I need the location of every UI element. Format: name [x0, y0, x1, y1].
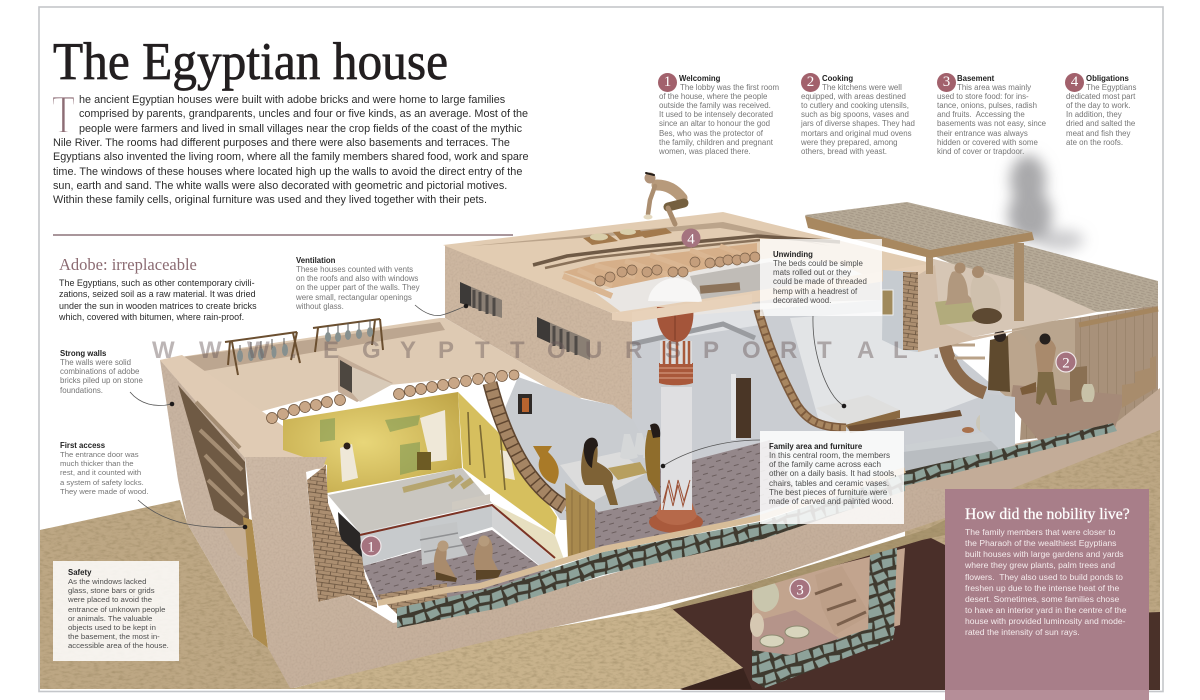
back mural wall [283, 392, 462, 493]
box: Unwinding [760, 239, 882, 316]
box: Family area and furniture [760, 431, 904, 524]
box: Family area and furniture: of the family came across each [769, 460, 881, 469]
marker 3 [790, 579, 810, 599]
numbered note 1: Welcoming: Welcoming [679, 74, 720, 83]
marker 3: 3 [796, 582, 804, 598]
raised platform [328, 468, 492, 533]
numbered note 4: Obligations: of the day to work. [1066, 101, 1130, 110]
note: First access: a system of safety locks. [60, 478, 144, 487]
numbered note 2: Cooking: The kitchens were well [822, 83, 902, 92]
numbered note 2: Cooking: such as big spoons, vases and [801, 110, 909, 119]
badge 1 [658, 73, 677, 92]
front low wall with stones [378, 423, 1117, 628]
upper floor interior rooms [625, 270, 1015, 530]
text: Adobe irreplaceable [59, 255, 257, 322]
marker 2: 2 [1062, 356, 1070, 372]
numbered note 1: Welcoming [658, 73, 779, 156]
intro text block: Within these family cells, original furniture was used and they lived together with their pets. [53, 194, 487, 206]
basement jars and plates [750, 578, 809, 647]
numbered note 1: Welcoming: It used to be intensely decorated [659, 110, 773, 119]
numbered note 4: Obligations: In addition, they [1066, 110, 1122, 119]
box: Safety: accessible area of the house. [68, 641, 169, 650]
numbered note 3: Basement: and fruits. Accessing the [937, 110, 1025, 119]
bench [905, 430, 998, 470]
intro text block: sun, earth and sand. The white walls were also decorated with geometric and pictorial motives. [53, 180, 507, 192]
kitchen: plank back wall and reed roof [925, 243, 1158, 440]
badge 2 [801, 73, 820, 92]
text: Adobe irreplaceable: which, covered with bitumen, where rain-proof. [59, 312, 244, 322]
numbered note 2: Cooking: were they prepared, among [801, 138, 898, 147]
box: Family area and furniture: The best pieces of furniture were [769, 488, 887, 497]
note: Strong walls: Strong walls [60, 349, 106, 358]
numbered note 3: Basement: used to store food: for ins- [937, 92, 1029, 101]
panel: How did the nobility live [945, 489, 1149, 700]
box: Safety: the basement, the most in- [68, 632, 160, 641]
note: First access: rest, and it counted with [60, 468, 141, 477]
numbered note 2: Cooking: others, bread with yeast. [801, 147, 887, 156]
text: Adobe irreplaceable: The Egyptians, such as other contemporary civili- [59, 278, 255, 288]
small stairs [420, 522, 468, 565]
note: Strong walls: bricks piled up on stone [60, 376, 143, 385]
pergola reed roof [805, 202, 1033, 252]
text: Adobe irreplaceable: zations, seized soil as a raw material. It was dried [59, 289, 256, 299]
note: First access: The entrance door was [60, 450, 139, 459]
box: Safety [53, 561, 179, 661]
curved brick cut wall left [755, 297, 846, 428]
box: Unwinding: decorated wood. [773, 296, 831, 305]
note: Ventilation: on the roofs and also with windows [296, 274, 418, 283]
numbered note 4: Obligations: The Egyptians [1086, 83, 1136, 92]
panel text: freshen up due to the intense heat of the [965, 583, 1119, 593]
sand above basement [654, 520, 945, 610]
box: Safety: glass, stone bars or grids [68, 586, 155, 595]
panel text: desert. Sometimes, some families chose [965, 594, 1119, 604]
numbered note 1: Welcoming: of the house, where the people [659, 92, 767, 101]
room 1 with painted walls [245, 370, 945, 688]
numbered note 3: Basement [937, 73, 1046, 156]
panel text: the Pharaoh of the wealthiest Egyptians [965, 538, 1116, 548]
numbered note 2: Cooking [800, 73, 915, 156]
note: Strong walls [60, 349, 143, 395]
box: Unwinding: mats rolled out or they [773, 268, 851, 277]
box: Safety: were placed to avoid the [68, 595, 152, 604]
intro text block: he ancient Egyptian houses were built with adobe bricks and were home to large families [79, 94, 505, 106]
title: The Egyptian house [53, 33, 448, 91]
note: First access: They were made of wood. [60, 487, 148, 496]
door leaf [243, 517, 268, 648]
curved brick cut wall right [945, 345, 985, 393]
badge 1: 1 [664, 74, 671, 90]
note: Ventilation: on the upper part of the walls. They [296, 283, 420, 292]
numbered note 2: Cooking: mortars and original mud ovens [801, 129, 912, 138]
floor tiles [363, 530, 555, 612]
numbered note 3: Basement: their entrance was always [937, 129, 1028, 138]
note: Strong walls: combinations of adobe [60, 367, 139, 376]
intro text block: people were farmers and lived in small villages near the crop fields of the coast of the mythic [79, 123, 522, 135]
numbered note 3: Basement: tance, onions, pulses, radish [937, 101, 1037, 110]
front roof beam [612, 263, 935, 322]
man working on the roof [644, 172, 684, 224]
panel text: where they grew plants, palm trees and [965, 560, 1115, 570]
terrace with pergola [805, 202, 1097, 352]
numbered note 4: Obligations: Obligations [1086, 74, 1129, 83]
note: Ventilation: were small, rectangular openings [296, 293, 412, 302]
box: Unwinding: The beds could be simple [773, 259, 863, 268]
low brick strip [377, 583, 447, 614]
note: Ventilation: These houses counted with vents [296, 265, 413, 274]
note: Strong walls: foundations. [60, 386, 103, 395]
note: Ventilation: Ventilation [296, 256, 335, 265]
box: Family area and furniture: made of carved and painted wood. [769, 497, 894, 506]
numbered note 2: Cooking: equipped, with areas destined [801, 92, 906, 101]
box: Unwinding: Unwinding [773, 250, 813, 259]
bright beam over column [632, 294, 752, 322]
numbered note 3: Basement: kind of cover or trapdoor. [937, 147, 1024, 156]
badge 3 [937, 73, 956, 92]
sand, front and left ground [40, 500, 752, 689]
numbered note 1: Welcoming: outside the family was received. [659, 101, 771, 110]
box: Safety: entrance of unknown people [68, 605, 165, 614]
box: Safety: or animals. The valuable [68, 614, 152, 623]
marker 1 [361, 536, 381, 556]
side mural wall [458, 392, 557, 535]
numbered note 4: Obligations: dedicated most part [1066, 92, 1135, 101]
seated woman [581, 438, 618, 505]
logs [563, 246, 760, 296]
terrace food mat [935, 298, 985, 325]
roof opening with logs [594, 258, 880, 320]
numbered note 3: Basement: Basement [957, 74, 994, 83]
note: First access: First access [60, 441, 105, 450]
left roof vent [338, 355, 393, 402]
numbered note 2: Cooking: jars of diverse shapes. They had [801, 119, 915, 128]
logs lower roof [266, 370, 519, 424]
amber jar [533, 446, 559, 484]
numbered note 4: Obligations: ate on the roofs. [1066, 138, 1123, 147]
box: Family area and furniture: In this central room, the members [769, 451, 890, 460]
marker 2 [1056, 352, 1076, 372]
numbered note 1: Welcoming: the family, children and pregnant [659, 138, 773, 147]
numbered note 4: Obligations [1065, 73, 1136, 147]
box: Unwinding: could be made of threaded [773, 277, 867, 286]
bread boards [583, 228, 672, 245]
panel text: flowers. They also used to build ponds to [965, 572, 1123, 582]
box: Safety: Safety [68, 568, 91, 577]
note: First access [60, 441, 148, 496]
note: First access: much thicker than the [60, 459, 134, 468]
numbered note 1: Welcoming: women, was placed there. [659, 147, 751, 156]
numbered note 1: Welcoming: Bes, who was the protector of [659, 129, 763, 138]
box: Safety: As the windows lacked [68, 577, 146, 586]
basement 3 [654, 520, 945, 690]
badge 2: 2 [807, 74, 814, 90]
marker 4: 4 [687, 232, 695, 248]
seated figures [434, 536, 502, 582]
terrace figures [945, 262, 1002, 324]
panel heading: How did the nobility live? [965, 506, 1130, 523]
numbered note 3: Basement: hidden or covered with some [937, 138, 1038, 147]
curved brick cut wall room 1 [490, 383, 565, 507]
bed [816, 395, 900, 425]
box: Family area and furniture: chairs, tables and ceramic vases. [769, 479, 889, 488]
intro text block: T [52, 84, 75, 145]
numbered note 3: Basement: basements was not easy, since [937, 119, 1046, 128]
badge 3: 3 [943, 74, 950, 90]
numbered note 1: Welcoming: The lobby was the first room [680, 83, 779, 92]
brick corner [307, 465, 377, 608]
pergola posts [926, 243, 1024, 321]
watermark: WWW.EGYPTTOURSPORTAL. [152, 337, 940, 364]
box: Safety: objects used to be kept in [68, 623, 156, 632]
right end wall, kitchen floor and front band [905, 356, 1160, 525]
intro text block [52, 84, 529, 206]
windows [460, 282, 590, 360]
kitchen steps [1122, 356, 1156, 408]
panel text: rated the intensity of sun rays. [965, 627, 1080, 637]
numbered note 2: Cooking: Cooking [822, 74, 853, 83]
left roof with wall [160, 318, 582, 648]
panel text: house with provided luminosity and mode- [965, 616, 1126, 626]
dome [648, 278, 702, 302]
numbered note 2: Cooking: to cutlery and cooking utensils, [801, 101, 909, 110]
interior door [736, 378, 751, 438]
marker 4 [682, 228, 700, 248]
family room [533, 294, 800, 558]
corner pillar and front wall [245, 457, 945, 688]
intro text block: Egyptians also invented the living room, where all the family members shared food, work and spare [53, 151, 529, 163]
basement stone wall [752, 548, 897, 688]
intro text block: time. The windows of these houses where located high up the walls to avoid the direct entry of the [53, 166, 522, 178]
badge 4: 4 [1071, 74, 1078, 90]
panel text: The family members that were closer to [965, 527, 1115, 537]
divider rule [53, 234, 513, 236]
drying racks [225, 319, 383, 375]
badge 4 [1065, 73, 1084, 92]
column [649, 307, 703, 533]
note: Ventilation [296, 256, 420, 311]
roof of the upper block [443, 212, 935, 420]
numbered note 3: Basement: This area was mainly [957, 83, 1031, 92]
intro text block: comprised by parents, grandparents, uncles and four or five kinds, as an average. Most of the [79, 108, 528, 120]
marker 1: 1 [367, 540, 375, 556]
standing woman [645, 423, 660, 495]
smoke [1008, 155, 1084, 250]
intro text block: Nile River. The rooms had different purposes and there were also basements and terraces. The [53, 137, 510, 149]
numbered note 4: Obligations: dried and salted the [1066, 119, 1135, 128]
panel text: to have an interior yard in the centre of the [965, 605, 1126, 615]
box: Family area and furniture: Family area and furniture [769, 442, 862, 451]
note: Strong walls: The walls were solid [60, 358, 131, 367]
basement stairs [815, 566, 870, 635]
text: Adobe irreplaceable: Adobe: irreplaceable [59, 255, 197, 274]
panel text: built houses with large gardens and yards [965, 549, 1124, 559]
white bench [560, 452, 647, 503]
panel text [965, 527, 1126, 637]
white vases [620, 433, 654, 459]
numbered note 4: Obligations: meat and fish they [1066, 129, 1130, 138]
front door leaf [565, 483, 595, 558]
panel lower strip [945, 690, 1149, 700]
text: Adobe irreplaceable: under the sun in wooden matrices to create bricks [59, 301, 257, 311]
kitchen figures [988, 330, 1095, 405]
note: Ventilation: without glass. [296, 302, 344, 311]
sand, right side behind panel [905, 425, 1160, 620]
numbered note 1: Welcoming: since an altar to honour the god [659, 119, 770, 128]
wall niche [518, 394, 532, 414]
box: Family area and furniture: other on a daily basis. It had stools, [769, 469, 896, 478]
box: Unwinding: hemp with a headrest of [773, 287, 857, 296]
